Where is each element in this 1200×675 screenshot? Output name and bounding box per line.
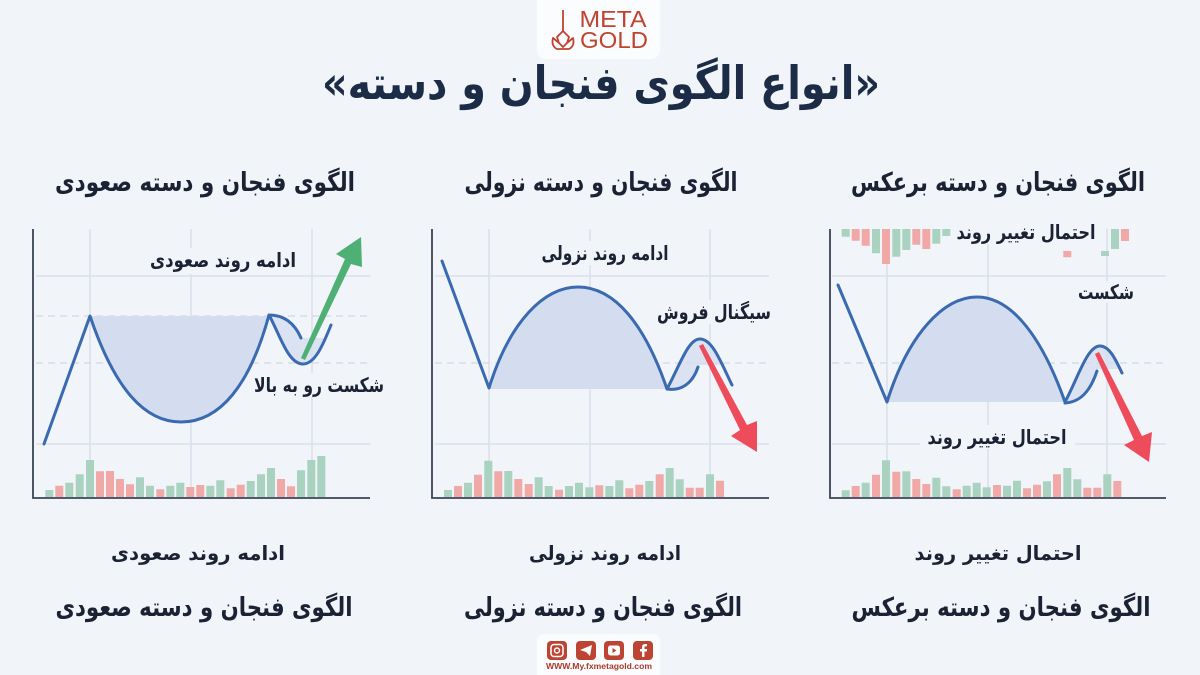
panel: bullish cup and handle [33,167,388,623]
chart: bearish pattern [432,229,773,498]
volume bars [846,460,1107,497]
caption: bullish: ادامه روند صعودی [111,541,285,565]
footer: social links [537,634,660,675]
arrow: down [1095,352,1152,462]
heading: bullish: الگوی فنجان و دسته صعودی [55,167,355,198]
logo: Meta Gold: GOLD [580,27,648,53]
caption: bearish: ادامه روند نزولی [529,541,681,565]
label: breakout: شکست [1078,280,1134,304]
icon: facebook [633,641,653,660]
heading: bearish: الگوی فنجان و دسته نزولی [464,167,738,198]
label: trend continuation down: ادامه روند نزولی [542,241,668,265]
icon: youtube [604,641,624,660]
label: trend reversal top: احتمال تغییر روند [956,220,1096,244]
label: upward breakout: شکست رو به بالا [254,373,384,397]
logo: Meta Gold: META [580,6,647,32]
panel: inverted cup and handle [830,167,1166,623]
caption: inverted: احتمال تغییر روند [914,541,1082,565]
arrow: up [301,237,362,360]
chart: bullish pattern [33,229,388,498]
label: trend continuation up: ادامه روند صعودی [150,248,296,272]
logo: Meta Gold [537,0,660,59]
arrow: down [699,344,757,452]
footer heading: bearish: الگوی فنجان و دسته نزولی [464,592,742,623]
icon: telegram [576,641,596,660]
inverted top bars [846,229,1115,257]
icon: instagram [547,641,567,660]
website url: WWW.My.fxmetagold.com [546,662,652,671]
chart: inverted pattern [830,220,1166,498]
panel: bearish cup and handle [432,167,773,623]
label: sell signal: سیگنال فروش [657,300,771,324]
label: trend reversal bottom: احتمال تغییر روند [928,425,1066,449]
title: «انواع الگوی فنجان و دسته» [322,56,880,110]
footer heading: bullish: الگوی فنجان و دسته صعودی [56,592,352,623]
